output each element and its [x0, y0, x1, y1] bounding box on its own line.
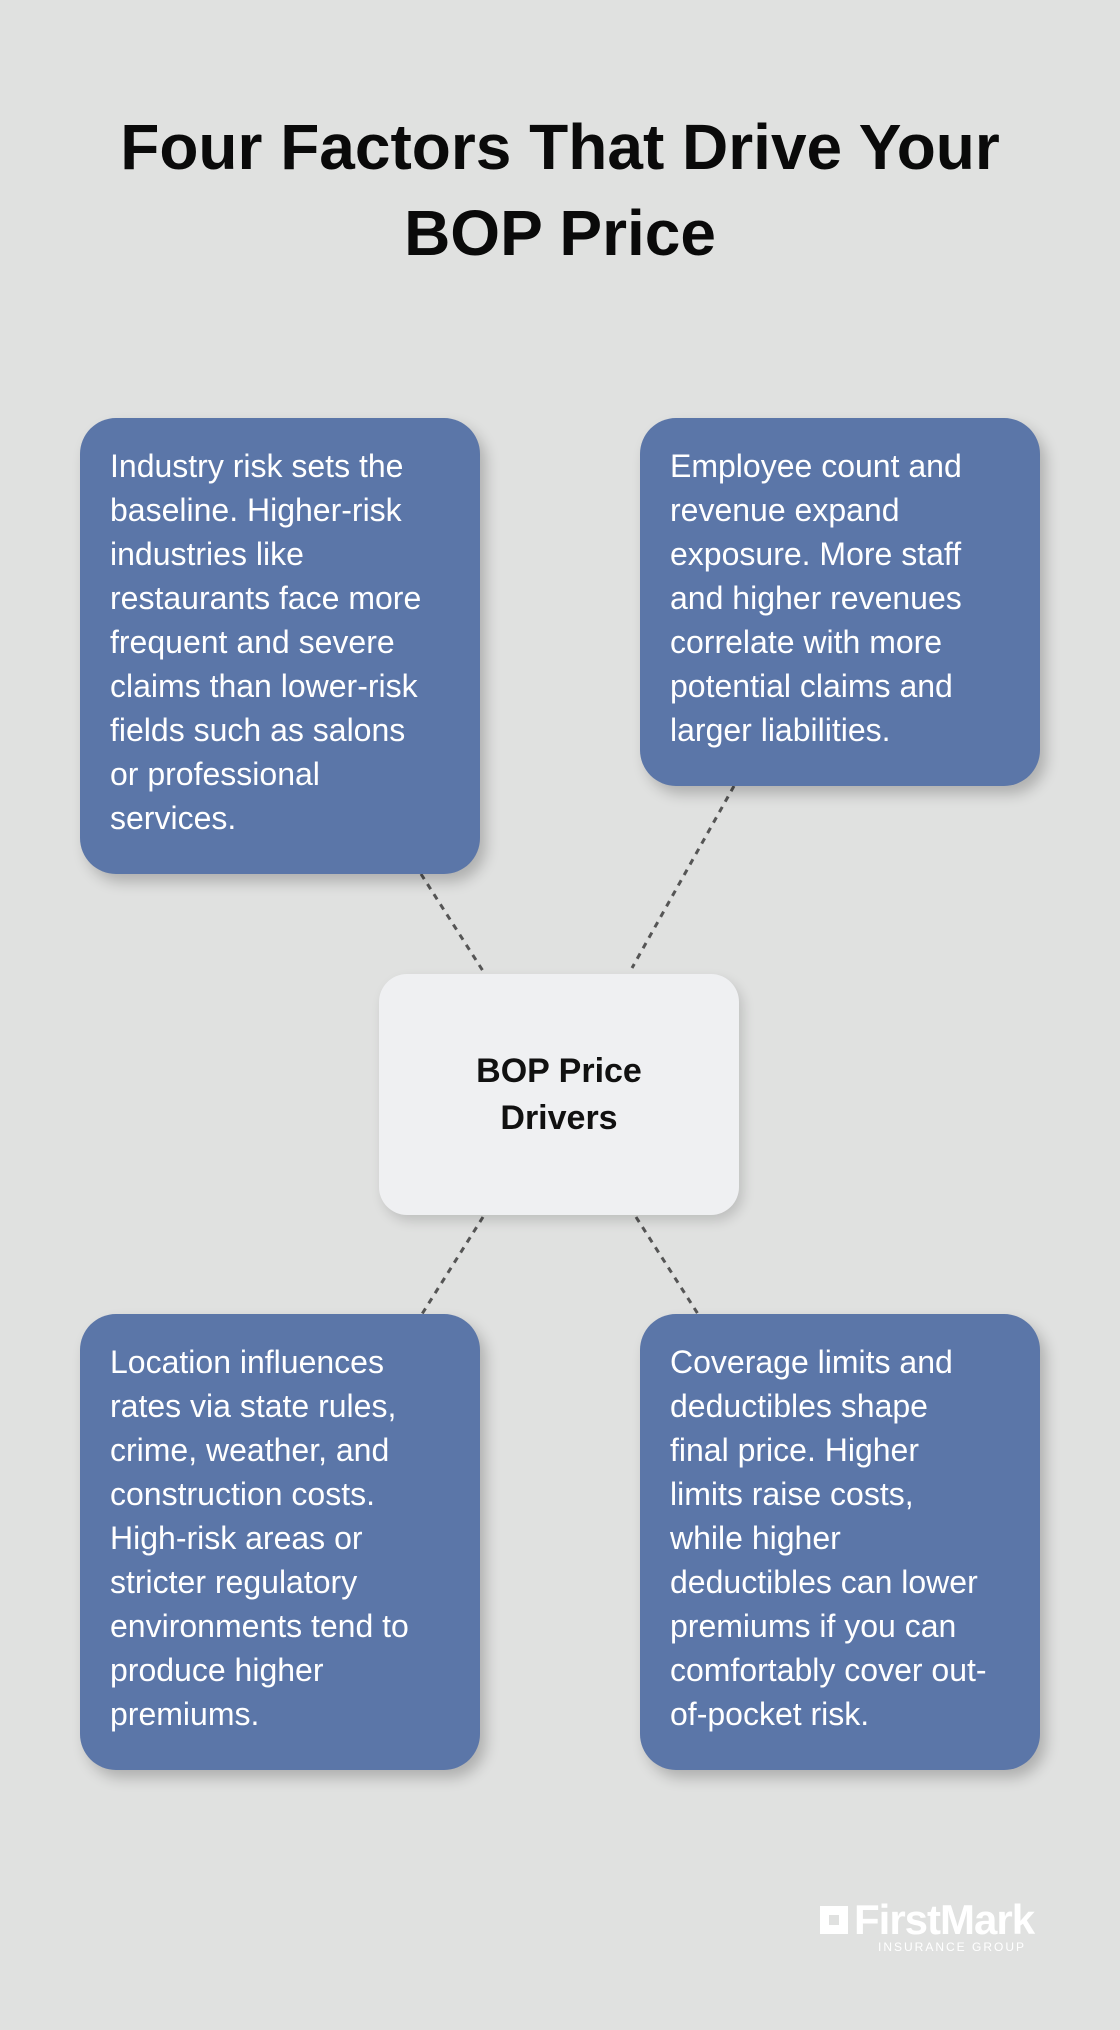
- panel: location: rates via state rules,: [110, 1388, 396, 1424]
- panel: coverage limits: Coverage limits and: [670, 1344, 953, 1380]
- panel: employee count: larger liabilities.: [670, 712, 891, 748]
- center node: Drivers: [500, 1098, 618, 1136]
- panel: location: construction costs.: [110, 1476, 375, 1512]
- panel: location: crime, weather, and: [110, 1432, 389, 1468]
- panel: coverage limits: deductibles can lower: [670, 1564, 978, 1600]
- panel: location: environments tend to: [110, 1608, 409, 1644]
- center node: BOP Price: [476, 1052, 642, 1090]
- panel: location: Location influences: [110, 1344, 384, 1380]
- panel: location: produce higher: [110, 1652, 323, 1688]
- panel: coverage limits: while higher: [670, 1520, 841, 1556]
- panel: industry risk: Industry risk sets the: [110, 448, 403, 484]
- title: [120, 111, 1000, 269]
- center node: [379, 974, 739, 1215]
- panel: employee count: Employee count and: [670, 448, 962, 484]
- panel: industry risk: restaurants face more: [110, 580, 421, 616]
- panel: coverage limits: premiums if you can: [670, 1608, 956, 1644]
- panel: coverage limits: deductibles shape: [670, 1388, 928, 1424]
- logo: FirstMark: [854, 1896, 1034, 1943]
- logo: INSURANCE GROUP: [878, 1940, 1026, 1954]
- logo: [820, 1896, 1035, 1954]
- panel: location: [80, 1314, 480, 1770]
- panel: employee count: correlate with more: [670, 624, 942, 660]
- panel: industry risk: services.: [110, 800, 236, 836]
- panel: employee count: exposure. More staff: [670, 536, 961, 572]
- panel: industry risk: industries like: [110, 536, 304, 572]
- panel: industry risk: or professional: [110, 756, 320, 792]
- panel: industry risk: claims than lower-risk: [110, 668, 418, 704]
- panel: industry risk: fields such as salons: [110, 712, 405, 748]
- panel: coverage limits: comfortably cover out-: [670, 1652, 987, 1688]
- panel: employee count: revenue expand: [670, 492, 900, 528]
- panel: location: stricter regulatory: [110, 1564, 357, 1600]
- panel: coverage limits: [640, 1314, 1040, 1770]
- panel: employee count: [640, 418, 1040, 786]
- panel: employee count: potential claims and: [670, 668, 953, 704]
- panel: coverage limits: final price. Higher: [670, 1432, 919, 1468]
- title: BOP Price: [404, 197, 716, 269]
- panel: location: premiums.: [110, 1696, 259, 1732]
- panel: employee count: and higher revenues: [670, 580, 962, 616]
- panel: coverage limits: of-pocket risk.: [670, 1696, 869, 1732]
- panel: location: High-risk areas or: [110, 1520, 363, 1556]
- panel: coverage limits: limits raise costs,: [670, 1476, 914, 1512]
- panel: industry risk: baseline. Higher-risk: [110, 492, 402, 528]
- title: Four Factors That Drive Your: [120, 111, 1000, 183]
- panel: industry risk: [80, 418, 480, 874]
- panel: industry risk: frequent and severe: [110, 624, 395, 660]
